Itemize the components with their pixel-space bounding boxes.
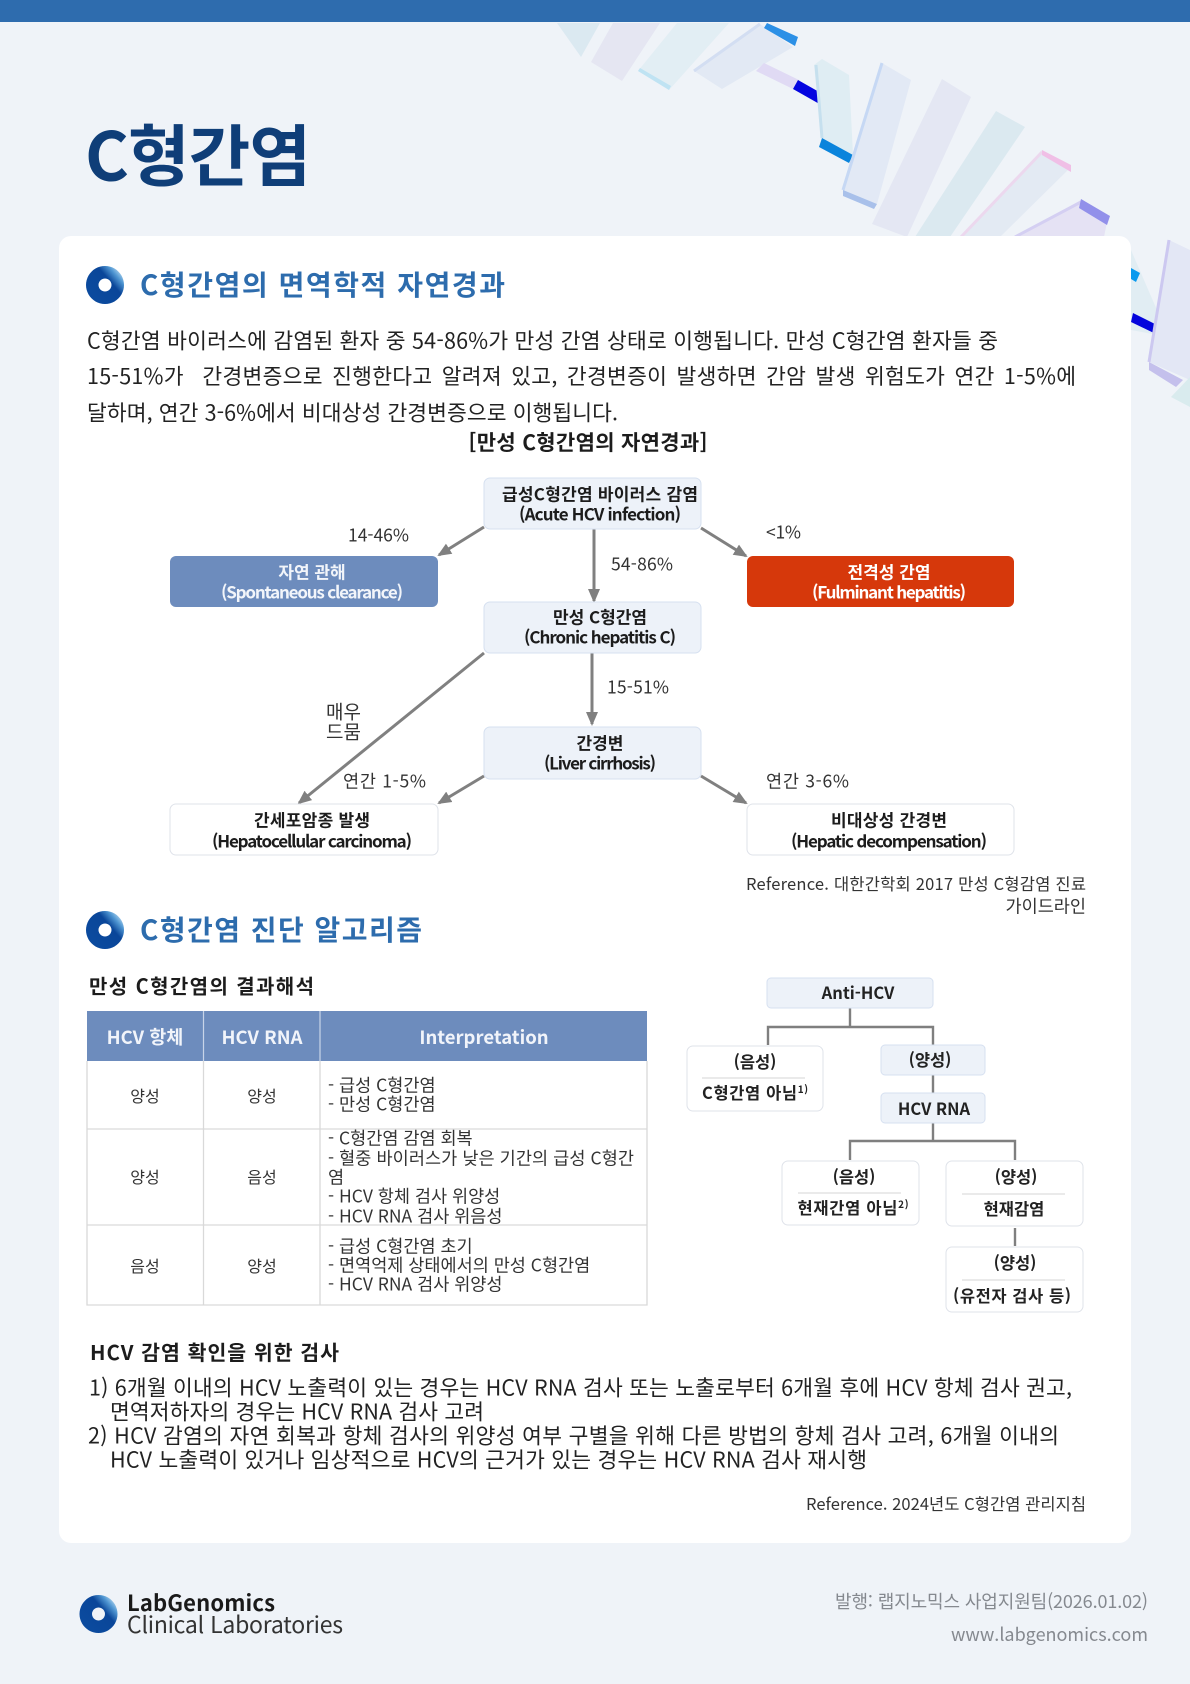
text block: footnotes: 2) HCV 감염의 자연 회복과 항체 검사의 위양성 여부 구별을 위해 다른 방법의 항체 검사 고려, 6개월 이내의 (88, 1420, 1059, 1450)
row 2: - HCV RNA 검사 위음성 (328, 1204, 502, 1228)
node: acute HCV infection (484, 478, 701, 529)
node: fulminant hepatitis: (Fulminant hepatitis) (812, 578, 966, 604)
decorative ribbon (557, 23, 1190, 407)
row 3 (130, 1234, 590, 1296)
text block: footnotes: HCV 노출력이 있거나 임상적으로 HCV의 근거가 있는 경우는 HCV RNA 검사 재시행 (110, 1444, 867, 1474)
node: chronic hepatitis C: 만성 C형간염 (553, 604, 647, 628)
table: interpretation (87, 1011, 647, 1305)
node: chronic hepatitis C (484, 602, 701, 653)
label: rare: 드뭄 (326, 718, 361, 744)
node: negative, no current infection: 현재간염 아님 (798, 1195, 897, 1219)
title: C형간염 (85, 104, 311, 200)
node: negative, no current infection (782, 1161, 919, 1225)
heading: result interpretation: 만성 C형간염의 결과해석 (89, 970, 314, 1000)
node: hepatic decompensation: (Hepatic decompensation) (791, 828, 987, 852)
table header: Interpretation (419, 1024, 549, 1050)
row 2: 염 (328, 1164, 344, 1190)
node: negative, no current infection: 2) (898, 1196, 908, 1210)
row 2: - C형간염 감염 회복 (328, 1126, 473, 1150)
node: HCV RNA: HCV RNA (898, 1096, 971, 1120)
node: positive (881, 1045, 985, 1075)
icon: section 1 donut (86, 266, 124, 304)
node: positive, genotype test: (유전자 검사 등) (953, 1283, 1071, 1307)
row 2: - 혈중 바이러스가 낮은 기간의 급성 C형간 (328, 1146, 634, 1170)
node: positive: (양성) (909, 1047, 951, 1071)
footer logo: Clinical Laboratories (127, 1606, 343, 1640)
row 1: 양성 (130, 1083, 160, 1107)
label: under 1%: <1% (766, 520, 801, 544)
connectors (768, 1008, 1015, 1246)
reference: guideline 2017: 가이드라인 (1006, 894, 1086, 918)
reference: guideline 2024: Reference. 2024년도 C형간염 관리지침 (806, 1491, 1086, 1515)
footer logo: LabGenomics (127, 1586, 275, 1618)
label: yearly 3-6%: 연간 3-6% (766, 768, 849, 794)
row 1: 양성 (247, 1083, 277, 1107)
node: positive, genotype test: (양성) (994, 1250, 1036, 1274)
node: negative, not hepatitis C: C형간염 아님 (702, 1080, 797, 1104)
row 3: - 면역억제 상태에서의 만성 C형간염 (328, 1252, 590, 1278)
heading: flowchart caption: [만성 C형간염의 자연경과] (468, 427, 708, 457)
node: spontaneous clearance: 자연 관해 (278, 558, 346, 584)
node: liver cirrhosis: (Liver cirrhosis) (544, 750, 656, 774)
text block: footnotes: 면역저하자의 경우는 HCV RNA 검사 고려 (110, 1396, 484, 1426)
text block: intro: 달하며, 연간 3-6%에서 비대상성 간경변증으로 이행됩니다. (87, 396, 618, 428)
node: liver cirrhosis (484, 727, 701, 779)
row 1: - 급성 C형간염 (328, 1072, 436, 1098)
node: spontaneous clearance: (Spontaneous clearance) (221, 578, 403, 604)
reference: guideline 2017 (746, 871, 1086, 918)
text block: footnotes (88, 1372, 1072, 1474)
node: positive, current infection: 현재감염 (984, 1196, 1044, 1220)
table header (87, 1011, 647, 1061)
node: chronic hepatitis C: (Chronic hepatitis C) (524, 624, 676, 648)
row 3: 음성 (130, 1253, 160, 1277)
node: negative, not hepatitis C: 1) (798, 1080, 808, 1096)
arrow: chronic to cirrhosis (590, 653, 594, 724)
table header: HCV RNA (222, 1024, 303, 1050)
label: yearly 1-5%: 연간 1-5% (343, 768, 426, 794)
footer publisher info (835, 1588, 1148, 1647)
node: spontaneous clearance (170, 556, 438, 607)
node: negative, no current infection: (음성) (833, 1164, 875, 1188)
heading: diagnosis algorithm: C형간염 진단 알고리즘 (140, 909, 422, 949)
node: hepatic decompensation: 비대상성 간경변 (831, 806, 947, 832)
footer publisher info: 발행: 랩지노믹스 사업지원팀(2026.01.02) (835, 1588, 1148, 1614)
label: rare: 매우 (326, 698, 361, 724)
node: hepatocellular carcinoma: (Hepatocellular carcinoma) (212, 828, 412, 852)
heading: natural course: C형간염의 면역학적 자연경과 (140, 264, 505, 304)
node: fulminant hepatitis: 전격성 간염 (848, 558, 930, 584)
label: 54-86%: 54-86% (611, 552, 673, 576)
label: rare (326, 698, 361, 744)
node: acute HCV infection: (Acute HCV infection) (519, 500, 681, 526)
node: negative, not hepatitis C: (음성) (734, 1049, 776, 1073)
row 3: - HCV RNA 검사 위양성 (328, 1272, 502, 1296)
arrow: acute to fulminant (701, 528, 746, 556)
arrow: acute to chronic (592, 529, 596, 601)
text block: intro (87, 324, 1076, 428)
flowchart: diagnosis algorithm (687, 978, 1083, 1312)
node: Anti-HCV (767, 978, 933, 1008)
node: Anti-HCV: Anti-HCV (821, 980, 895, 1004)
node: positive, current infection (946, 1161, 1083, 1226)
node: negative, not hepatitis C (687, 1046, 823, 1111)
node: positive, current infection: (양성) (995, 1164, 1037, 1188)
label: 15-51%: 15-51% (607, 674, 669, 700)
arrow: chronic to HCC (299, 653, 484, 803)
node: positive, genotype test (946, 1247, 1083, 1312)
reference: guideline 2017: Reference. 대한간학회 2017 만성 C형감염 진료 (746, 871, 1086, 895)
panel: main card (59, 236, 1131, 1543)
node: acute HCV infection: 급성C형간염 바이러스 감염 (502, 480, 698, 506)
text block: intro: 15-51%가 간경변증으로 진행한다고 알려져 있고, 간경변증이 발생하면 간암 발생 위험도가 연간 1-5%에 (87, 360, 1076, 391)
row 2 (130, 1126, 634, 1228)
text block: footnotes: 1) 6개월 이내의 HCV 노출력이 있는 경우는 HCV RNA 검사 또는 노출로부터 6개월 후에 HCV 항체 검사 권고, (89, 1372, 1072, 1402)
flowchart: natural course (170, 478, 1014, 855)
row 2: 양성 (130, 1164, 160, 1188)
node: hepatic decompensation (747, 804, 1014, 855)
heading: HCV confirmation tests: HCV 감염 확인을 위한 검사 (90, 1336, 339, 1366)
icon: section 2 donut (86, 911, 124, 949)
node: HCV RNA (881, 1093, 985, 1123)
row 1 (130, 1072, 436, 1116)
row 2: 음성 (247, 1164, 277, 1188)
node: liver cirrhosis: 간경변 (577, 730, 623, 754)
row 1: - 만성 C형간염 (328, 1092, 436, 1116)
arrow: cirrhosis to HCC (439, 776, 484, 803)
footer publisher info: www.labgenomics.com (951, 1621, 1148, 1647)
table header: HCV 항체 (107, 1024, 183, 1050)
node: hepatocellular carcinoma (170, 804, 438, 855)
arrow: acute to clearance (439, 527, 484, 555)
row 3: 양성 (247, 1253, 277, 1277)
row 2: - HCV 항체 검사 위양성 (328, 1184, 500, 1208)
icon: logo donut (80, 1595, 118, 1633)
arrow: cirrhosis to decompensation (701, 776, 746, 803)
label: 14-46%: 14-46% (348, 522, 409, 548)
row 3: - 급성 C형간염 초기 (328, 1234, 473, 1258)
top bar (0, 0, 1190, 22)
footer logo (80, 1586, 343, 1640)
node: hepatocellular carcinoma: 간세포암종 발생 (254, 806, 370, 832)
text block: intro: C형간염 바이러스에 감염된 환자 중 54-86%가 만성 간염 상태로 이행됩니다. 만성 C형간염 환자들 중 (87, 324, 998, 356)
node: fulminant hepatitis (747, 556, 1014, 607)
